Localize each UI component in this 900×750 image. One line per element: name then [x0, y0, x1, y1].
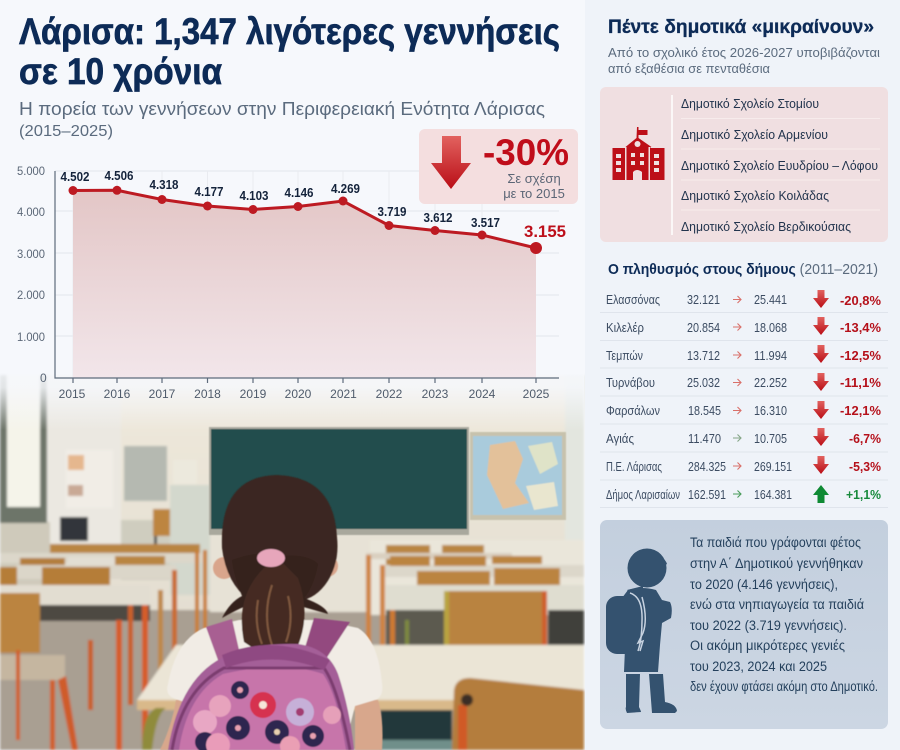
school names: Δημοτικό Σχολείο Βερδικούσιας	[681, 219, 851, 234]
x axis labels: 2025	[523, 387, 550, 401]
row: Dimos Larisaion: 162.591	[688, 487, 726, 502]
right column background	[585, 0, 900, 750]
row: Farsala: 18.545	[688, 403, 721, 418]
y axis labels: 1.000	[17, 330, 45, 344]
row: PE Larisas: Π.Ε. Λάρισας	[606, 459, 662, 474]
x axis labels: 2016	[104, 387, 131, 401]
x axis labels: 2020	[285, 387, 312, 401]
school names: Δημοτικό Σχολείο Αρμενίου	[681, 127, 828, 142]
value labels: 4.177	[194, 185, 224, 199]
heading: five schools: Πέντε δημοτικά «μικραίνουν»	[608, 17, 874, 38]
row: Tyrnavos	[606, 373, 881, 391]
school names: Δημοτικό Σχολείο Κοιλάδας	[681, 188, 829, 203]
note text: το 2020 (4.146 γεννήσεις),	[690, 577, 838, 592]
row: Tempi	[606, 345, 881, 363]
row: Elassona: 32.121	[687, 292, 720, 307]
row: PE Larisas: -5,3%	[849, 459, 881, 474]
value labels: 3.719	[378, 205, 407, 219]
row: PE Larisas	[606, 456, 881, 474]
row: Kileler	[606, 317, 881, 335]
callout: -30%: Σε σχέση	[507, 171, 561, 186]
note text: Τα παιδιά που γράφονται φέτος	[690, 535, 861, 550]
title: σε 10 χρόνια	[19, 51, 222, 92]
school names	[681, 96, 878, 234]
x axis labels: 2022	[376, 387, 403, 401]
y axis labels: 4.000	[17, 205, 45, 219]
value labels: 4.318	[150, 178, 179, 192]
icon: school building	[612, 127, 664, 180]
row: Dimos Larisaion	[606, 485, 881, 503]
row: Elassona: -20,8%	[840, 293, 881, 308]
note text: του 2023, 2024 και 2025	[690, 659, 827, 674]
heading: five schools: Από το σχολικό έτος 2026-2027 υποβιβάζονται	[608, 45, 880, 60]
y axis labels: 2.000	[17, 288, 45, 302]
icon: big down arrow	[431, 136, 471, 189]
icon: student with backpack	[606, 548, 677, 713]
subtitle	[19, 99, 545, 140]
data points	[68, 186, 542, 254]
x axis labels: 2021	[330, 387, 357, 401]
x axis labels: 2017	[149, 387, 176, 401]
blackboard	[209, 427, 469, 535]
row: Farsala: -12,1%	[840, 403, 881, 418]
row: Kileler: 18.068	[754, 320, 787, 335]
row: Tempi: 13.712	[687, 348, 720, 363]
row: Agia	[606, 428, 881, 446]
line chart: births	[17, 164, 566, 401]
row: Dimos Larisaion: 164.381	[754, 487, 792, 502]
panel: schools list	[600, 87, 888, 242]
x axis labels: 2024	[469, 387, 496, 401]
row: Elassona: 25.441	[754, 292, 787, 307]
row: Farsala	[606, 401, 881, 419]
value labels: 4.502	[60, 170, 90, 184]
subtitle: (2015–2025)	[19, 123, 113, 140]
title	[19, 11, 560, 92]
y axis labels	[17, 164, 47, 385]
value labels: 3.155	[524, 222, 566, 241]
row: Tyrnavos: Τυρνάβου	[606, 375, 655, 390]
value labels: 4.146	[284, 186, 314, 200]
y axis labels: 0	[40, 371, 47, 385]
value labels: 4.269	[331, 182, 360, 196]
row: Tyrnavos: -11,1%	[840, 375, 881, 390]
axes	[55, 171, 559, 383]
row: Tempi: 11.994	[754, 348, 787, 363]
value labels: 3.612	[424, 211, 453, 225]
classroom photo	[0, 375, 584, 750]
note text: ενώ στα νηπιαγωγεία τα παιδιά	[690, 597, 864, 612]
note text: στην Α΄ Δημοτικού γεννήθηκαν	[690, 556, 863, 571]
subtitle: Η πορεία των γεννήσεων στην Περιφερειακή Ενότητα Λάρισας	[19, 99, 545, 119]
row: Dimos Larisaion: Δήμος Λαρισαίων	[606, 487, 680, 502]
note text: του 2022 (3.719 γεννήσεις).	[690, 618, 847, 633]
value labels: 4.103	[240, 189, 269, 203]
row: Tempi: Τεμπών	[606, 348, 643, 363]
row: Agia: Αγιάς	[606, 431, 634, 446]
school names: Δημοτικό Σχολείο Στομίου	[681, 96, 819, 111]
row: Agia: 11.470	[688, 431, 721, 446]
callout: -30%: -30%	[483, 132, 569, 173]
x axis labels	[59, 387, 550, 401]
y axis labels: 5.000	[17, 164, 45, 178]
foreground desk	[137, 645, 584, 708]
row: Agia: -6,7%	[849, 431, 881, 446]
row: Farsala: 16.310	[754, 403, 787, 418]
row: Farsala: Φαρσάλων	[606, 403, 660, 418]
area under line	[73, 190, 536, 378]
row: Kileler: -13,4%	[840, 320, 881, 335]
row: Tempi: -12,5%	[840, 348, 881, 363]
table: population by municipality	[600, 290, 888, 508]
row: Elassona: Ελασσόνας	[606, 292, 660, 307]
value labels	[60, 169, 566, 241]
heading: population: Ο πληθυσμός στους δήμους (2011–2021)	[608, 261, 878, 278]
photo top fade	[0, 345, 584, 430]
value labels: 4.506	[104, 169, 134, 183]
note text	[690, 535, 878, 694]
x axis labels: 2018	[194, 387, 221, 401]
row: Elassona	[606, 290, 881, 308]
girl	[160, 475, 382, 750]
row: Kileler: Κιλελέρ	[606, 320, 644, 335]
left desks	[50, 544, 200, 556]
school names: Δημοτικό Σχολείο Ευυδρίου – Λόφου	[681, 158, 878, 173]
x axis labels: 2015	[59, 387, 86, 401]
callout: -30%	[419, 129, 578, 204]
row: Kileler: 20.854	[687, 320, 720, 335]
right desks	[386, 545, 430, 565]
title: Λάρισα: 1,347 λιγότερες γεννήσεις	[19, 11, 560, 52]
panel: note on generations	[600, 520, 888, 729]
heading: five schools: από εξαθέσια σε πενταθέσια	[608, 61, 770, 76]
map	[470, 432, 566, 520]
backpack flowers	[193, 681, 341, 750]
line	[73, 190, 536, 248]
y axis labels: 3.000	[17, 247, 45, 261]
row: Dimos Larisaion: +1,1%	[846, 487, 881, 502]
heading: five schools	[608, 17, 880, 76]
x axis labels: 2023	[422, 387, 449, 401]
callout: -30%: με το 2015	[503, 186, 565, 201]
row: PE Larisas: 284.325	[688, 459, 726, 474]
row: Agia: 10.705	[754, 431, 787, 446]
value labels: 3.517	[471, 216, 500, 230]
note text: Οι ακόμη μικρότερες γενιές	[690, 638, 845, 653]
row: Tyrnavos: 25.032	[687, 375, 720, 390]
row: PE Larisas: 269.151	[754, 459, 792, 474]
row: Tyrnavos: 22.252	[754, 375, 787, 390]
x axis labels: 2019	[240, 387, 267, 401]
